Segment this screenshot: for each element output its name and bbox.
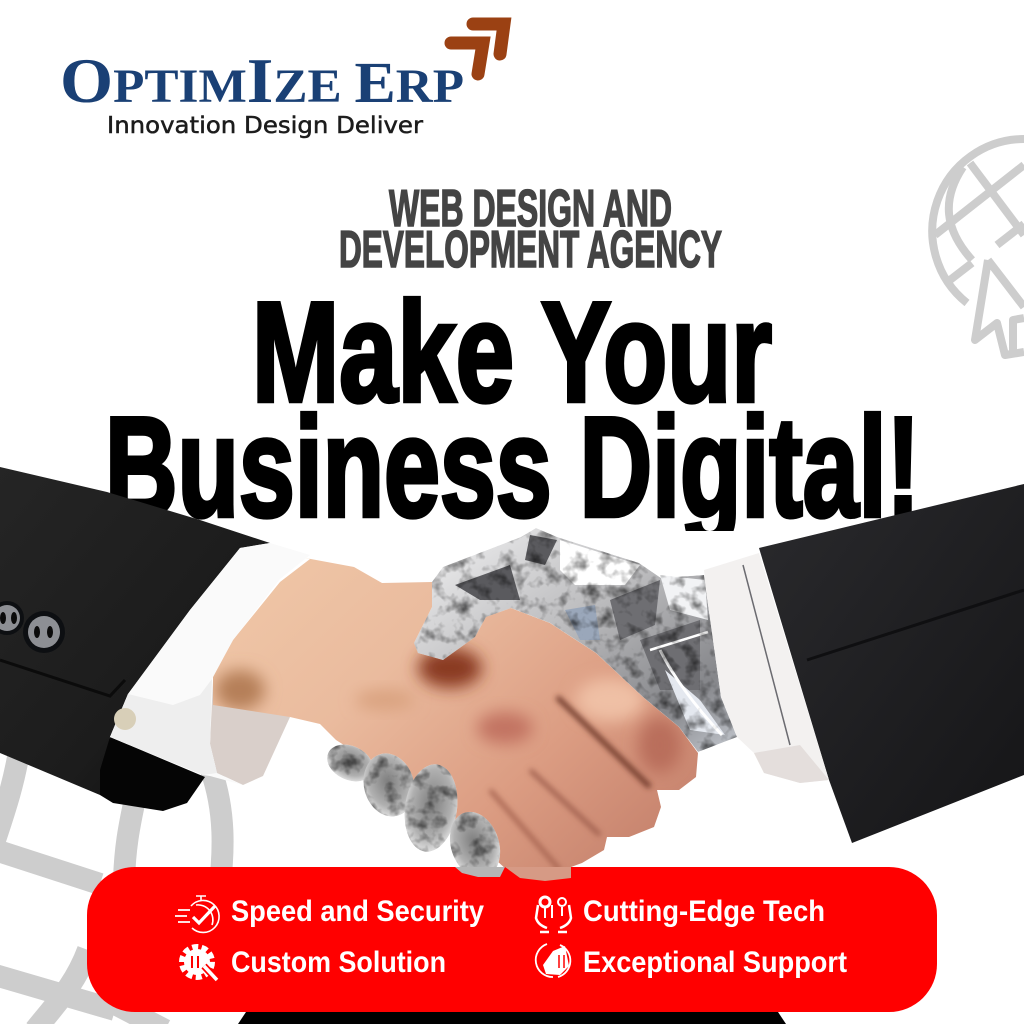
hand overlap on panel: [455, 867, 505, 877]
icon: support hand: [536, 944, 570, 977]
logo: [60, 24, 504, 139]
logo arrows: [451, 24, 504, 74]
feature: cutting-edge tech: [536, 895, 825, 932]
feature: speed and security: Speed and Security: [231, 895, 484, 928]
feature: exceptional support: Exceptional Support: [583, 946, 847, 979]
left jacket sleeve: [0, 467, 270, 811]
red feature panel: [87, 867, 937, 1012]
subheading: WEB DESIGN AND: [389, 180, 672, 238]
robot fingers: [321, 737, 508, 885]
logo tagline: Innovation Design Deliver: [107, 113, 424, 139]
main heading: Make Your: [252, 273, 772, 432]
robot hand: [414, 528, 737, 752]
main heading: [110, 296, 912, 531]
black shape under panel: [238, 1012, 786, 1024]
feature: cutting-edge tech: Cutting-Edge Tech: [583, 895, 825, 928]
hand skin overlap on panel: [505, 867, 571, 881]
feature: speed and security: [175, 895, 484, 932]
icon: gear and wrench: [182, 947, 217, 980]
right jacket sleeve: [759, 484, 1024, 843]
icon: hands with bulb and gear: [536, 897, 571, 932]
handshake illustration: [0, 467, 1024, 885]
logo wordmark: OPTIMIZE ERP: [60, 45, 464, 116]
icon: stopwatch: [175, 896, 219, 932]
right shirt cuff: [704, 553, 829, 783]
icon: globe with cursor, top right: [932, 139, 1024, 355]
icon: large globe, bottom left: [0, 745, 223, 1024]
jacket buttons: [0, 601, 65, 653]
subheading: DEVELOPMENT AGENCY: [339, 221, 722, 279]
subheading: [339, 180, 722, 279]
left shirt cuff: [110, 543, 310, 785]
skin hand: [213, 557, 698, 880]
left shirt cuff inner: [210, 680, 290, 785]
feature: custom solution: Custom Solution: [231, 946, 446, 979]
